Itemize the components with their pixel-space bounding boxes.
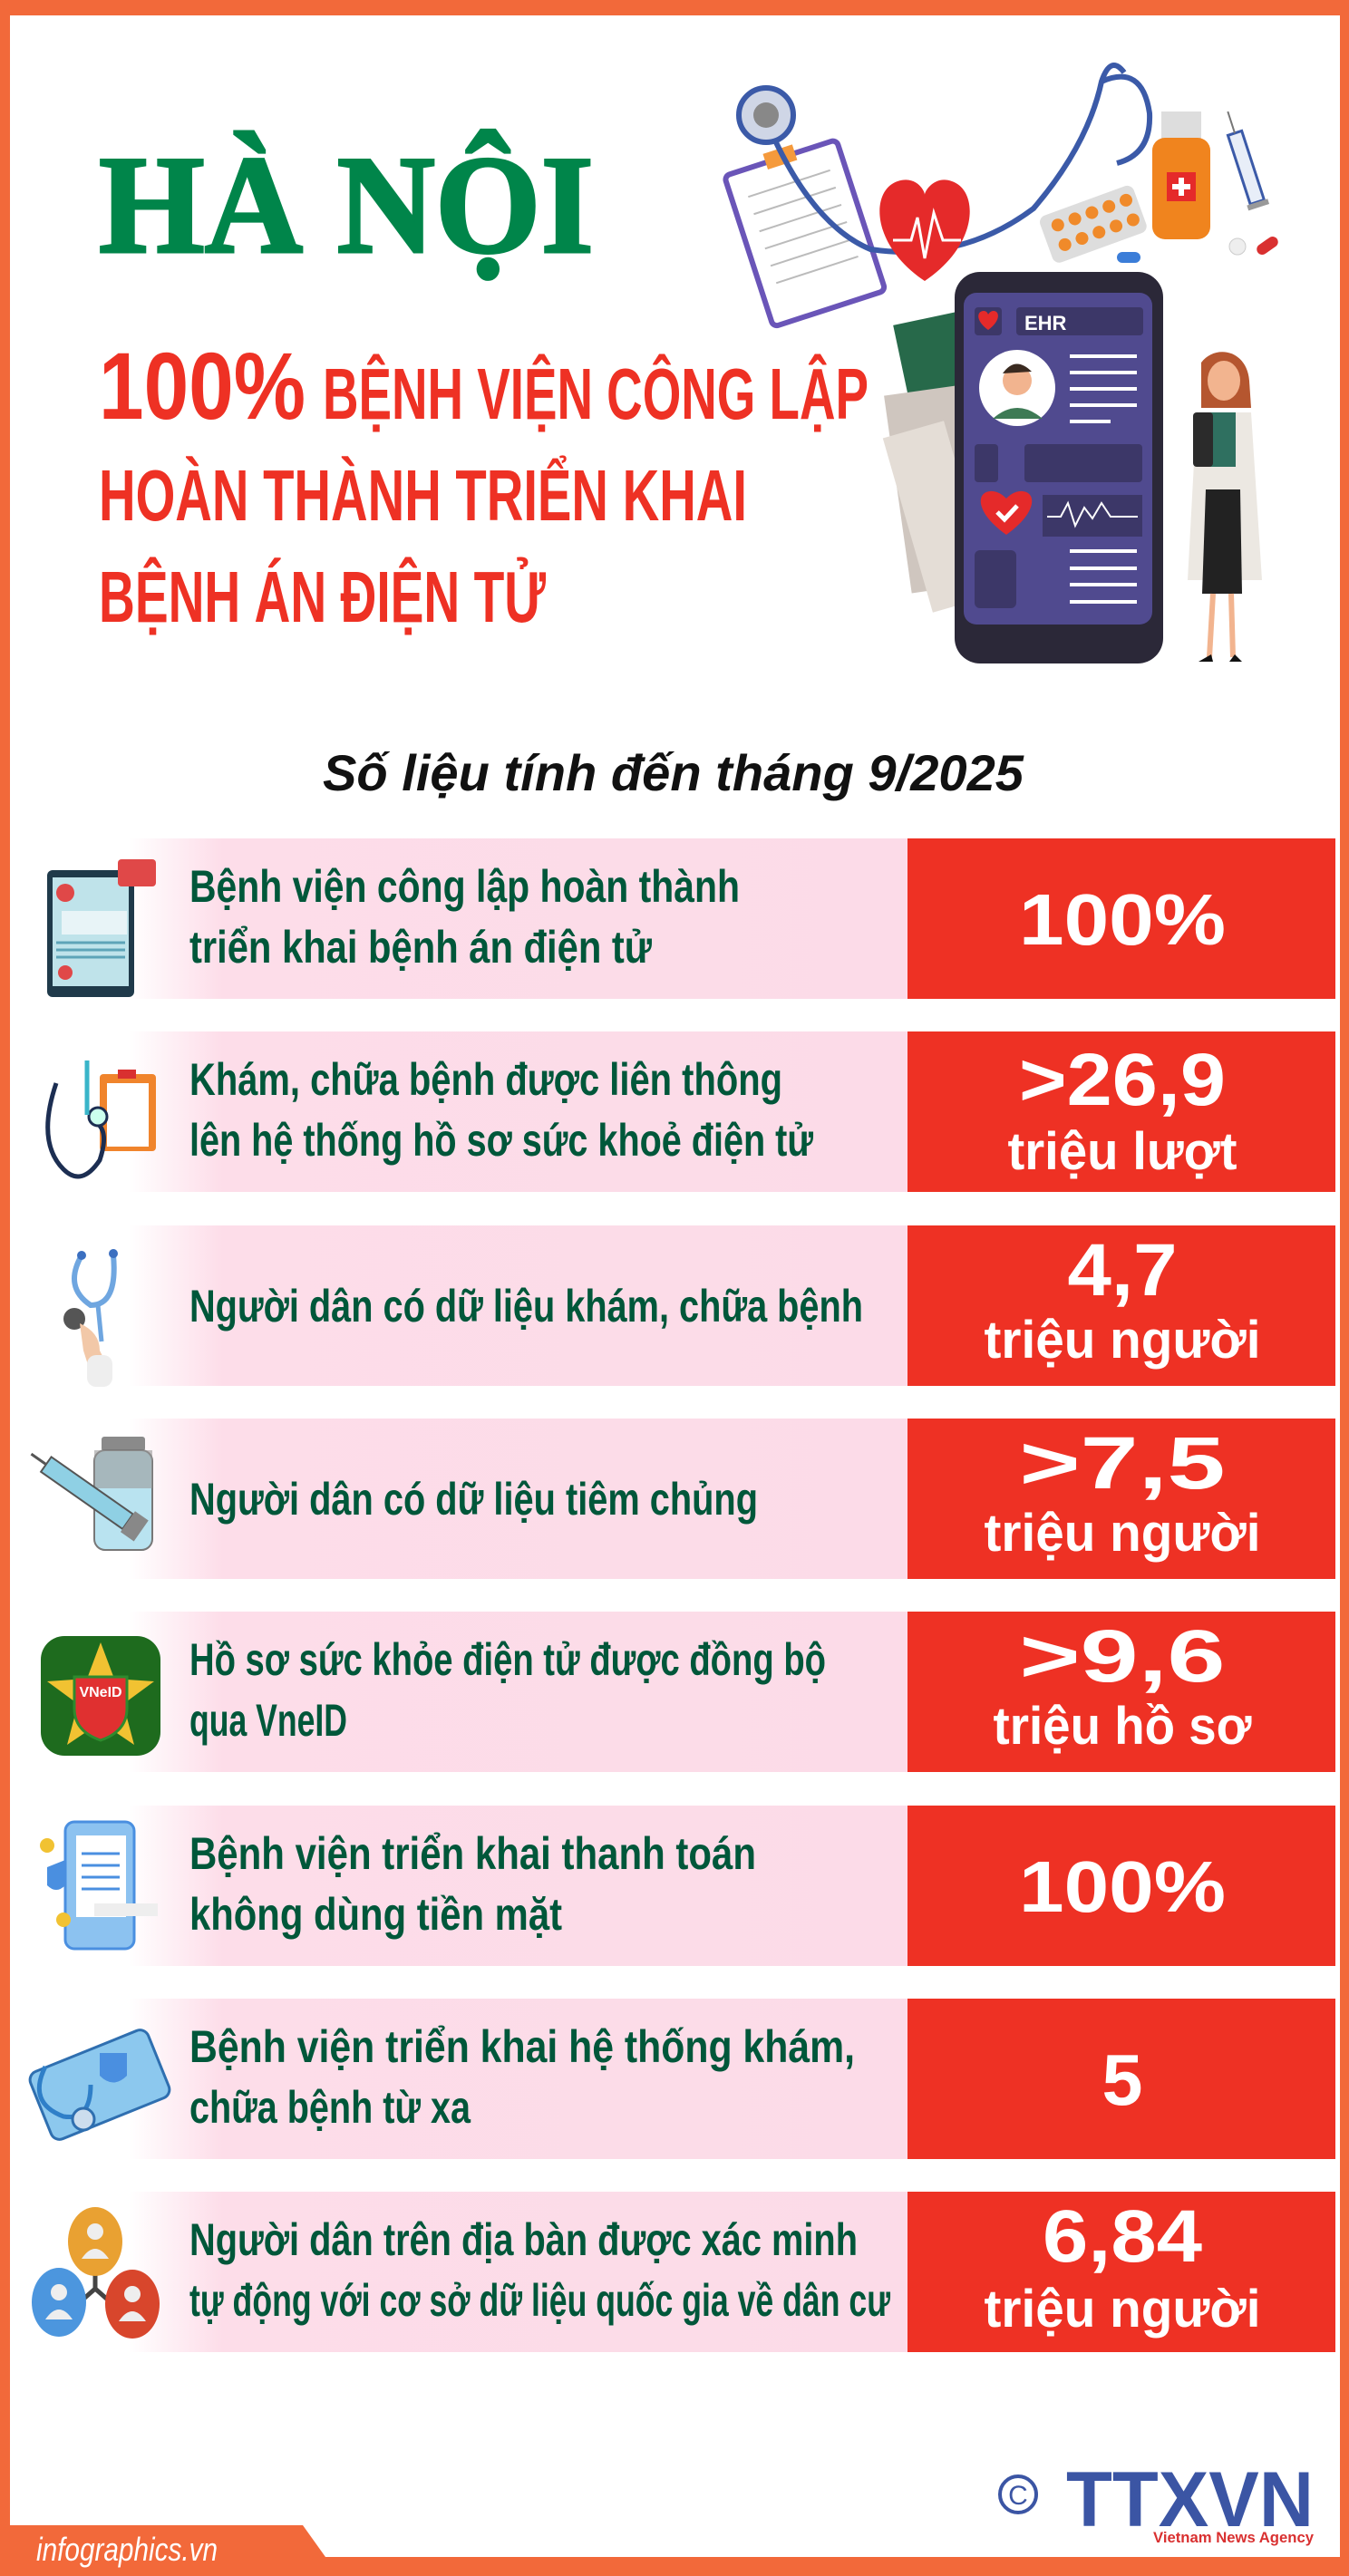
footer tab: infographics.vn — [0, 2525, 325, 2568]
header illustration — [722, 65, 1280, 663]
row 2 — [48, 1031, 1335, 1192]
header illustration: EHR — [1024, 312, 1067, 334]
value: >7,5 — [1019, 1422, 1226, 1505]
value: >26,9 — [1019, 1039, 1226, 1121]
value: triệu người — [985, 2280, 1260, 2339]
text: chữa bệnh từ xa — [189, 2082, 471, 2133]
subtitle headline: BỆNH ÁN ĐIỆN TỬ — [99, 557, 546, 637]
icon: vaccine vial and syringe — [24, 1437, 152, 1550]
value: triệu người — [985, 1504, 1260, 1563]
value — [994, 1615, 1252, 1756]
subtitle headline: BỆNH VIỆN CÔNG LẬP — [323, 353, 869, 434]
value: 100% — [1019, 1846, 1226, 1927]
heart — [879, 179, 970, 281]
logo: TTXVN: TTXVN — [1066, 2456, 1314, 2543]
subtitle headline: 100% — [99, 334, 306, 440]
value — [985, 1422, 1260, 1563]
logo: TTXVN: Vietnam News Agency — [1153, 2529, 1315, 2546]
value — [985, 1229, 1260, 1370]
clipboard — [722, 131, 886, 327]
value: 4,7 — [1068, 1229, 1177, 1312]
title: HÀ NỘI: HÀ NỘI — [99, 127, 594, 283]
icon: stethoscope and clipboard — [48, 1060, 156, 1177]
value: 6,84 — [1043, 2195, 1202, 2278]
logo: TTXVN: C — [1008, 2481, 1028, 2511]
icon: tablet medical record — [47, 859, 156, 997]
text: Người dân có dữ liệu khám, chữa bệnh — [189, 1281, 863, 1332]
syringe — [1218, 108, 1269, 210]
bottle — [1161, 111, 1201, 140]
icon: hand with stethoscope — [63, 1249, 118, 1387]
text — [189, 2214, 891, 2326]
row 1 — [47, 838, 1335, 999]
text: Người dân trên địa bàn được xác minh — [189, 2214, 858, 2265]
subtitle headline — [99, 334, 869, 637]
value: triệu hồ sơ — [994, 1697, 1252, 1756]
text: lên hệ thống hồ sơ sức khoẻ điện tử — [189, 1115, 814, 1166]
icon: VNeID badge: VNeID — [79, 1685, 122, 1700]
text — [189, 1054, 814, 1166]
text: triển khai bệnh án điện tử — [189, 922, 653, 973]
text: Bệnh viện công lập hoàn thành — [189, 861, 740, 912]
value: 100% — [1019, 879, 1226, 960]
text — [189, 1634, 826, 1746]
text: tự động với cơ sở dữ liệu quốc gia về dân cư — [189, 2275, 891, 2326]
footer tab: infographics.vn: infographics.vn — [36, 2531, 218, 2568]
text — [189, 2021, 855, 2133]
text: Khám, chữa bệnh được liên thông — [189, 1054, 782, 1105]
papers behind phone — [893, 312, 984, 459]
stethoscope — [739, 88, 793, 142]
row 6 — [40, 1806, 1335, 1966]
value: triệu người — [985, 1311, 1260, 1370]
subtitle headline: HOÀN THÀNH TRIỂN KHAI — [99, 455, 747, 536]
icon: people network — [32, 2207, 160, 2339]
pills — [1038, 184, 1149, 265]
phone — [955, 272, 1163, 663]
row 4 — [24, 1419, 1335, 1579]
value: >9,6 — [1019, 1615, 1226, 1698]
text: Hồ sơ sức khỏe điện tử được đồng bộ — [189, 1634, 826, 1685]
text: Người dân có dữ liệu tiêm chủng — [189, 1474, 758, 1525]
value: 5 — [1102, 2039, 1142, 2120]
text: Bệnh viện triển khai hệ thống khám, — [189, 2021, 855, 2072]
row 5 — [41, 1612, 1335, 1772]
doctor woman — [1201, 352, 1251, 408]
date note: Số liệu tính đến tháng 9/2025 — [323, 744, 1024, 801]
row 3 — [63, 1225, 1335, 1387]
value — [1008, 1039, 1237, 1181]
icon: VNeID badge — [41, 1636, 160, 1756]
icon: phone with receipt — [40, 1822, 158, 1949]
text — [189, 861, 740, 973]
value: triệu lượt — [1008, 1122, 1237, 1181]
row 7 — [27, 1999, 1335, 2159]
row 8 — [32, 2192, 1335, 2352]
text: qua VneID — [189, 1695, 347, 1746]
text: không dùng tiền mặt — [189, 1889, 562, 1940]
text — [189, 1828, 756, 1940]
icon: telemedicine phone — [27, 2028, 172, 2142]
text: Bệnh viện triển khai thanh toán — [189, 1828, 756, 1879]
value — [985, 2195, 1260, 2339]
